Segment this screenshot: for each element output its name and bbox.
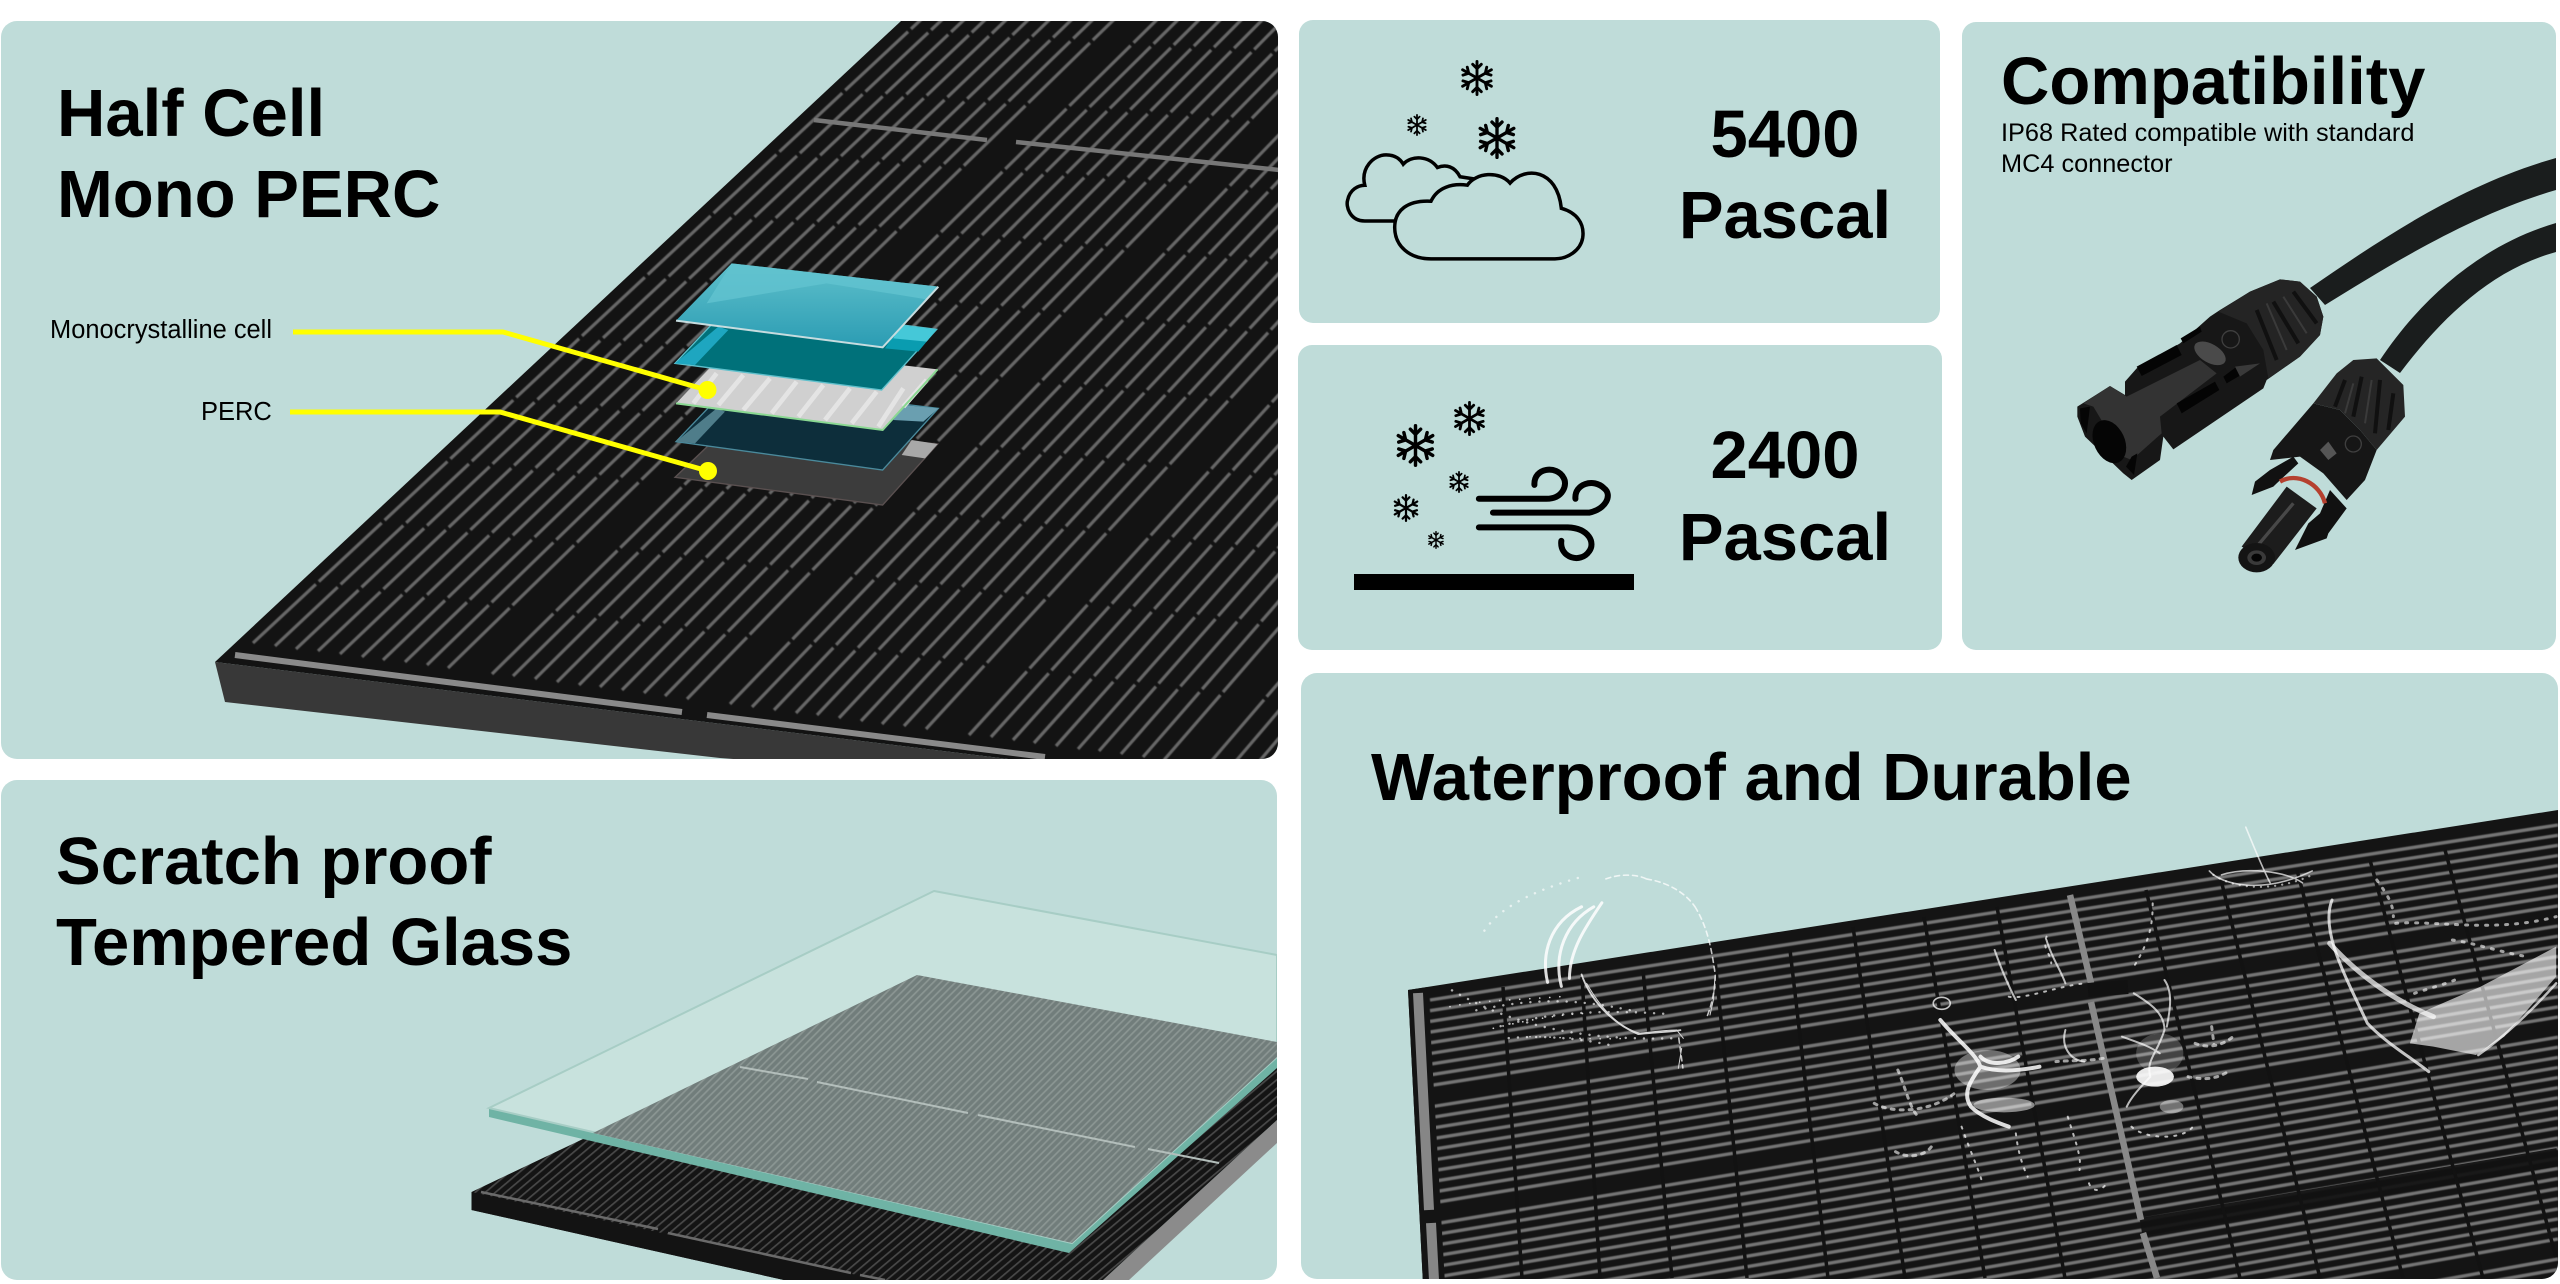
heading: scratch proof (56, 824, 572, 980)
splash: centre and right (1874, 880, 2556, 1190)
splash: left ring (1452, 827, 2312, 1068)
female connector (2077, 279, 2323, 480)
heading: scratch proof: Tempered Glass (56, 905, 572, 980)
heading: half cell mono perc (57, 76, 440, 232)
cable: female (2310, 158, 2556, 305)
male connector (2238, 358, 2405, 572)
exploded cell layers (675, 263, 938, 505)
value: 5400 Pascal: 5400 (1710, 97, 1860, 172)
panel: scratch proof tempered glass (1, 780, 1277, 1280)
heading: half cell mono perc: Mono PERC (57, 157, 440, 232)
frame ribbons (235, 655, 1045, 757)
panel: 2400 Pascal wind load (1298, 345, 1942, 650)
icon: clouds and snowflakes (1347, 61, 1583, 259)
text: compatibility description: MC4 connector (2001, 150, 2173, 178)
heading: compatibility: Compatibility (2001, 44, 2425, 119)
icon: MC4 connector pair (2077, 158, 2556, 572)
cable: male (2380, 223, 2556, 373)
value: 2400 Pascal: 2400 (1710, 418, 1860, 493)
heading: waterproof and durable: Waterproof and Durable (1371, 740, 2132, 815)
glass over solar panel image (472, 891, 1277, 1280)
droplets on left panel (1450, 977, 1715, 1068)
heading: half cell mono perc: Half Cell (57, 76, 325, 151)
panel: compatibility (1962, 22, 2556, 650)
callout: PERC (201, 398, 717, 480)
panel: waterproof and durable (1301, 673, 2558, 1284)
text: compatibility description (2001, 119, 2414, 178)
text: compatibility description: IP68 Rated compatible with standard (2001, 119, 2414, 147)
panel: half cell mono PERC (1, 21, 1278, 759)
solar panel perspective image (215, 21, 1278, 759)
callout: PERC: PERC (201, 398, 272, 426)
panel: 5400 Pascal snow load (1299, 20, 1940, 323)
heading: scratch proof: Scratch proof (56, 824, 492, 899)
callout: monocrystalline cell (50, 316, 716, 399)
value: 2400 Pascal (1679, 418, 1891, 575)
frame ribbons (1418, 993, 1434, 1280)
value: 2400 Pascal: Pascal (1679, 500, 1891, 575)
icon: wind and snowflakes (1354, 402, 1634, 590)
left frame (1408, 987, 1445, 1284)
panel side face (215, 662, 1007, 759)
value: 5400 Pascal: Pascal (1679, 178, 1891, 253)
solar panel with water splashes (1408, 810, 2558, 1284)
callout: monocrystalline cell: Monocrystalline cell (50, 316, 272, 344)
value: 5400 Pascal (1679, 97, 1891, 253)
